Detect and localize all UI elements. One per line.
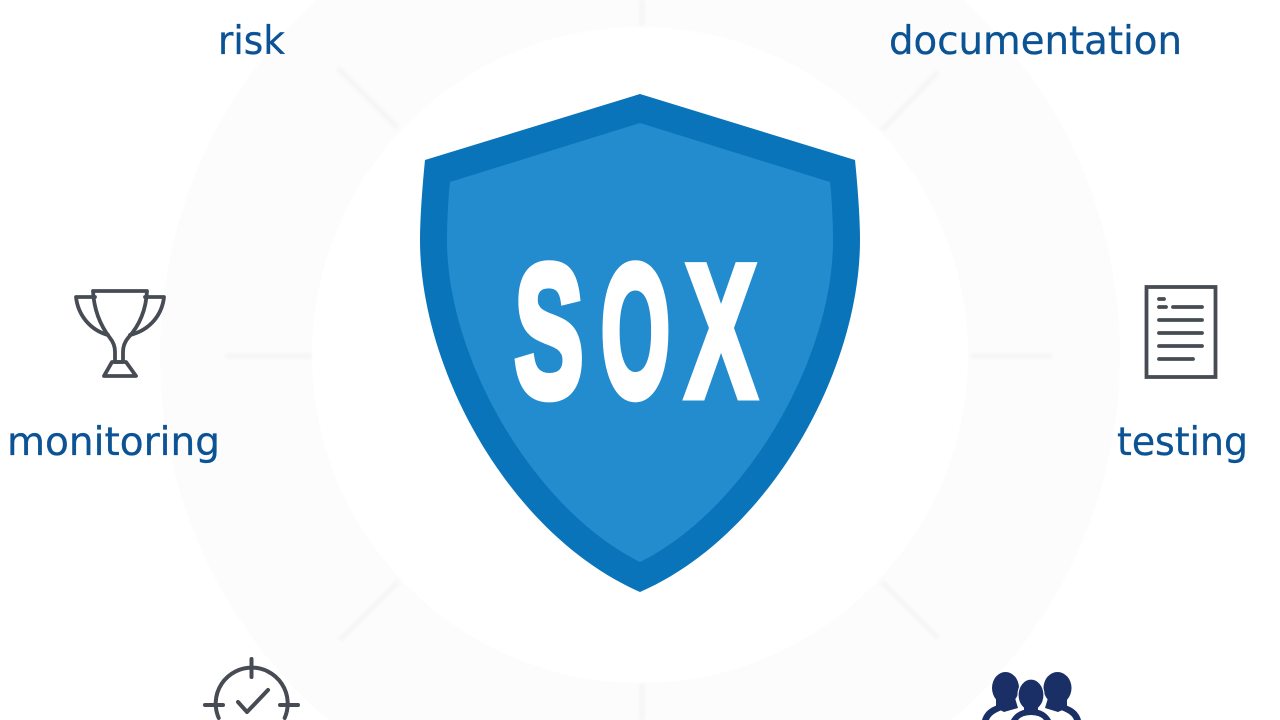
shield label SOX: S (514, 226, 584, 436)
shield (420, 94, 860, 592)
label: risk: risk (218, 19, 285, 64)
icon: people group (982, 672, 1081, 720)
icon: document (1146, 287, 1216, 377)
shield label SOX: X (686, 226, 756, 436)
shield label SOX: O (601, 226, 670, 436)
background ring (160, 0, 1120, 720)
icon: trophy (76, 291, 164, 376)
label: documentation: documentation (889, 19, 1182, 64)
label: testing: testing (1117, 420, 1248, 465)
shield label SOX (514, 226, 756, 436)
icon: target with check (205, 659, 298, 718)
label: monitoring: monitoring (7, 420, 220, 465)
